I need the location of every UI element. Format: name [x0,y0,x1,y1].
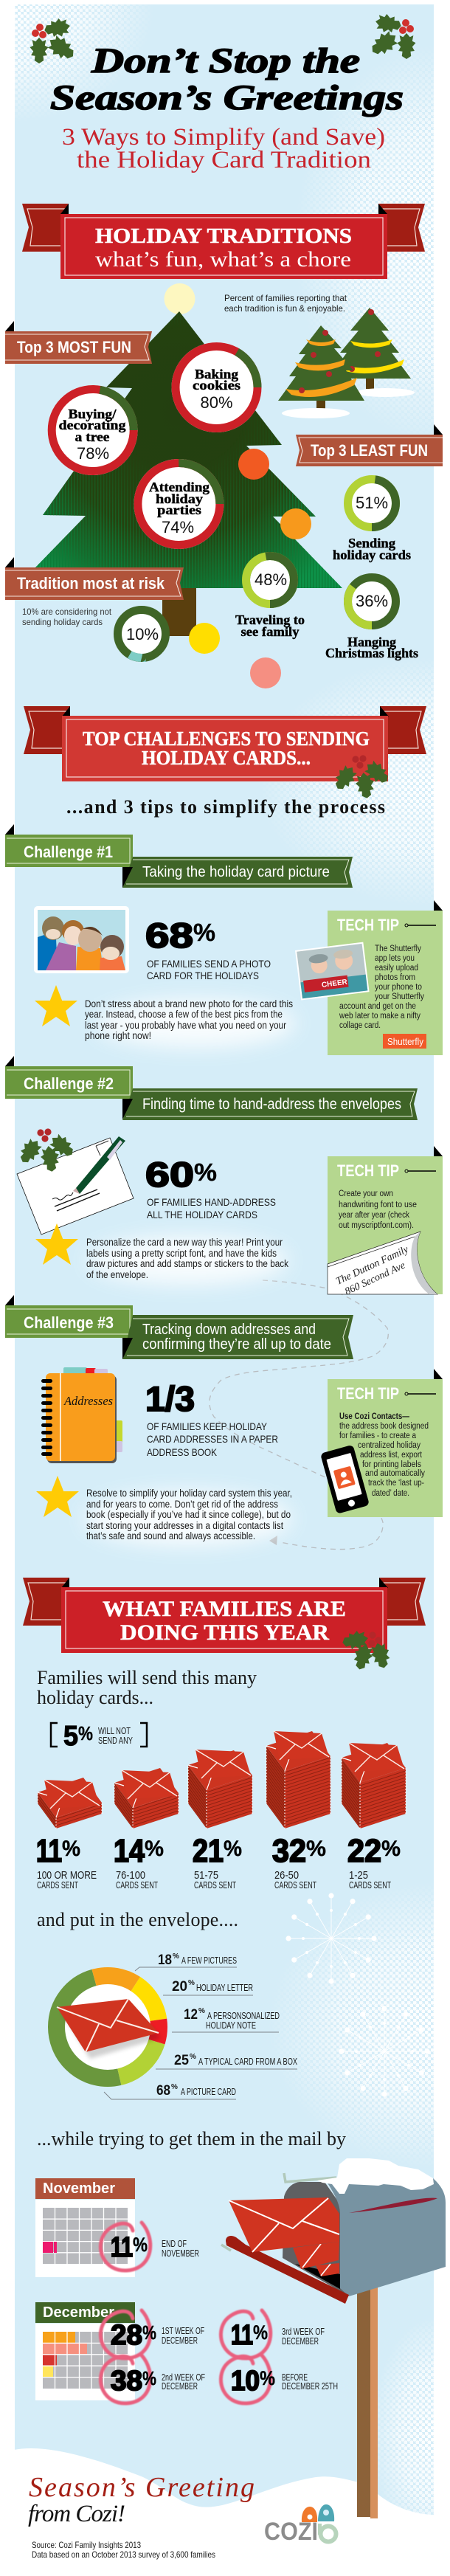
stat: 1/3: 1/3 [145,1379,195,1418]
ring: sending holiday cards 51% [333,480,411,562]
tech tip panel 2: The Dutton Family [334,1244,411,1288]
ring: buying decorating a tree 78%: a tree [75,429,110,444]
calendar: december: December [43,2304,114,2321]
tech tip panel 3: address list, export [360,1451,423,1460]
stack 22%: CARDS SENT [349,1880,391,1890]
tip text 2: labels using a pretty script font, and have the kids [86,1248,277,1259]
stat: 11% third week: DECEMBER [282,2335,319,2347]
challenge 3 heading: confirming they’re all up to date [142,1336,331,1353]
banner: top challenges [24,706,426,781]
ribbon: top 3 least fun: Top 3 LEAST FUN [311,441,428,460]
stack 21%: 21 [193,1833,224,1869]
tech tip panel 3: dated’ date. [372,1489,409,1498]
ring: hanging christmas lights 36%: 36% [356,592,388,610]
tech tip panel 1: account and get on the [339,1002,416,1011]
challenge 2 label [5,1056,133,1099]
stat: 1/3 [145,1379,278,1458]
stack 14%: % [145,1837,164,1861]
tech tip panel 1: The Shutterfly [375,945,421,953]
caption: percent of families: Percent of families reporting that [224,293,347,303]
ring: buying decorating a tree 78%: Buying/ [68,407,117,421]
stack 21%: % [224,1837,242,1861]
stat: 28%: 1ST WEEK OF [162,2325,204,2336]
label: 25%: A TYPICAL CARD FROM A BOX [198,2056,297,2067]
label: 12%: 12 [184,2007,198,2023]
challenge 3 heading: Tracking down addresses and [142,1322,316,1338]
stat: 28%: % [142,2321,156,2344]
tech tip panel 2 [328,1146,443,1298]
tech tip panel 1 [328,900,443,1055]
small christmas trees [278,308,415,418]
tip text 1: phone right now! [85,1030,151,1041]
caption: 10% considering [22,607,112,627]
stack 32%: 26-50 [274,1869,299,1882]
stack 11%: 11 [36,1833,62,1869]
caption: percent of families: each tradition is fun & enjoyable. [224,303,345,314]
banner: holiday traditions: HOLIDAY TRADITIONS [95,224,352,248]
challenge 2 label: Challenge #2 [24,1074,114,1093]
label: 12%: A PERSONSONALIZED [207,2010,280,2021]
stat: 60%: OF FAMILIES HAND-ADDRESS [147,1196,276,1208]
stat: 10% before dec 25: 10 [231,2366,260,2397]
holly on challenges banner [330,755,393,800]
label: 12%: HOLIDAY NOTE [206,2020,256,2031]
stack 32% [266,1731,330,1890]
snowflake 1 [285,1893,377,1984]
stat: 60%: % [194,1158,217,1186]
caption: percent of families [224,293,347,314]
tech tip panel 3: for printing labels [362,1460,421,1469]
stat: 60%: 60 [145,1155,194,1194]
tech tip panel 2: handwriting font to use [339,1201,417,1209]
challenge 1 label [5,824,133,867]
tip text 2: of the envelope. [86,1269,148,1280]
stat: 68% [145,916,271,981]
tech tip panel 1: web later to make a nifty [339,1012,420,1021]
tip text 2 [86,1237,288,1280]
label: 18%: % [173,1952,179,1961]
tech tip panel 3: centralized holiday [358,1441,420,1450]
ring: baking cookies 80%: 80% [200,393,233,412]
tech tip panel 2: 860 Second Ave [343,1260,407,1298]
heading: families will send [37,1667,257,1708]
challenge 2 heading [122,1088,418,1120]
stack 21%: CARDS SENT [194,1880,236,1890]
logo: cozi [264,2504,336,2546]
label: 68% [104,2083,236,2099]
icon: phone [320,1445,370,1514]
banner: what families are doing [23,1578,426,1653]
label: 68%: 68 [156,2083,170,2099]
stat: 10% before dec 25: DECEMBER 25TH [282,2380,338,2392]
stat: 60%: ALL THE HOLIDAY CARDS [147,1209,257,1220]
callout: 5% will not send any: WILL NOT [98,1725,131,1736]
stat: 10% before dec 25 [221,2355,338,2403]
challenge 3 heading [122,1315,353,1359]
tech tip panel 1: collage card. [339,1021,381,1030]
ribbon: top 3 least fun [296,424,443,466]
tech tip panel 2: Create your own [339,1189,393,1198]
label: 20%: 20 [172,1979,187,1995]
stack 14%: 76-100 [116,1869,145,1882]
closing greeting: from Cozi! [28,2501,125,2527]
heading: and put in the envelope: and put in the envelope.... [37,1909,238,1930]
big christmas tree [18,283,342,688]
stack 22%: % [381,1837,401,1861]
stack 11% [36,1778,102,1890]
tech tip panel 3: the address book designed [339,1422,429,1431]
tech tip panel 1: your Shutterfly [375,992,424,1001]
label: 68%: % [171,2083,178,2091]
tip text 3 [86,1488,292,1541]
ring: traveling to see family 48%: see family [240,624,300,639]
mailbox [221,2158,446,2518]
tip text 3: Resolve to simplify your holiday card system this year, [86,1488,292,1499]
calendar: november: November [43,2180,115,2197]
icon: address book: Addresses [63,1394,113,1408]
heading: families will send: Families will send this many [37,1667,257,1688]
stat: 68%: 68 [145,916,193,955]
calendar: november [35,2178,135,2277]
label: 18%: A FEW PICTURES [181,1955,237,1966]
stack 22%: 1-25 [349,1869,368,1882]
label: 68%: A PICTURE CARD [181,2086,236,2097]
tech tip panel 3 [328,1369,443,1517]
challenge 1 heading [122,857,353,888]
stack 11%: % [62,1837,80,1861]
ribbon: tradition most at risk: Tradition most at risk [17,574,165,593]
ring: baking cookies 80% [171,342,261,432]
callout: 5% will not send any [51,1721,147,1752]
subheading: 3 tips: ...and 3 tips to simplify the process [66,796,385,818]
icon: envelope and pen [15,1128,134,1235]
stack 21% [188,1750,252,1890]
callout: 5% will not send any: 5 [63,1721,78,1752]
icon: star 1 [35,985,77,1026]
icon: address book [41,1367,122,1463]
calendar: december [35,2302,135,2400]
snowflake 2 [339,2006,430,2097]
stack 11%: 100 OR MORE [37,1869,97,1882]
challenge 1 label: Challenge #1 [24,843,113,861]
stat: 11% end of november [100,2223,199,2271]
stat: 38%: DECEMBER [162,2380,198,2392]
banner: holiday traditions: what’s fun, what’s a chore [95,247,351,272]
tech tip panel 1: your phone to [375,983,422,992]
source note: Data based on an October 2013 survey of 3,600 families [32,2549,215,2560]
caption: 10% considering: 10% are considering not [22,607,112,617]
ring: 10% at risk [118,610,165,658]
ring: sending holiday cards 51%: Sending [348,536,395,550]
tech tip panel 3: track the ‘last up- [368,1479,424,1488]
tech tip panel 3: and automatically [365,1469,425,1478]
tip text 1: year. Instead, choose a few of the best pics from the [85,1009,283,1020]
holly top right [367,13,415,60]
ring: hanging christmas lights 36%: Christmas lights [325,646,418,660]
stat: 68%: % [193,919,215,946]
ring: traveling to see family 48%: 48% [255,570,287,589]
ring: 10% at risk: 10% [126,625,159,643]
stat: 38%: 38 [111,2366,142,2397]
title: Season’s Greetings [50,78,404,117]
tip text 1 [85,998,293,1041]
tip text 3: that’s safe and sound and always accessible. [86,1530,255,1541]
title [50,41,404,117]
ring: buying decorating a tree 78%: 78% [77,444,109,463]
icon: photo card [295,942,370,1000]
tech tip panel 1: photos from [375,973,415,982]
stat: 10% before dec 25: % [260,2367,275,2389]
stat: 1/3: ADDRESS BOOK [147,1446,218,1458]
stat: 28% [100,2310,204,2358]
ring: traveling to see family 48%: Traveling to [235,612,305,627]
ring: traveling to see family 48% [235,556,305,639]
stack 14% [114,1768,179,1890]
ring: attending holiday parties 74% [134,459,224,549]
banner: top challenges: TOP CHALLENGES TO SENDING [83,728,370,750]
ribbon: top 3 most fun [5,321,152,364]
tech tip panel 2: TECH TIP [337,1161,399,1180]
ring: hanging christmas lights 36%: Hanging [347,635,396,649]
icon: photo card: CHEER [321,978,348,990]
connector arrowhead [269,1536,277,1545]
stat: 11% third week: % [253,2321,268,2344]
stack 22%: 22 [347,1833,381,1869]
stat: 38%: 2nd WEEK OF [162,2372,205,2383]
tip text 2: draw pictures and add stamps or stickers to the back [86,1258,288,1269]
label: 25% [156,2053,297,2069]
closing greeting: Season’s Greeting [29,2472,255,2503]
source note [32,2540,215,2560]
source note: Source: Cozi Family Insights 2013 [32,2540,141,2550]
banner: top challenges: HOLIDAY CARDS... [142,747,311,769]
challenge 3 label [5,1295,133,1338]
label: 20%: % [188,1979,195,1987]
banner: holiday traditions [22,204,425,279]
label: 20%: HOLIDAY LETTER [196,1982,253,1993]
glow behind tip 1 [96,1000,295,1047]
stat: 11% end of november: % [133,2234,148,2256]
ring: attending holiday parties 74%: parties [157,503,201,517]
icon: star 3 [36,1476,79,1517]
dashed connector [210,1280,388,1550]
callout: 5% will not send any: % [78,1722,93,1744]
stat: 28%: 28 [111,2320,142,2351]
stack 21%: 51-75 [194,1869,218,1882]
tip text 3: and for years to come. Don’t get rid of the address [86,1499,278,1510]
label: 25%: % [190,2053,196,2061]
glow behind tip 2 [89,1237,288,1284]
tip text 2: Personalize the card a new way this year! Print your [86,1237,283,1248]
holly on families banner [341,1629,393,1672]
ring: buying decorating a tree 78%: decorating [59,418,125,432]
challenge 2 heading: Finding time to hand-address the envelopes [142,1096,401,1113]
holly top left [30,17,79,64]
tech tip panel 3: Use Cozi Contacts— [339,1412,409,1421]
ring: attending holiday parties 74%: Attending [149,480,210,494]
label: 20% [163,1979,253,1995]
subtitle: 3 Ways to Simplify (and Save) [62,124,385,151]
tip text 1: last year - you probably have what you need on your [85,1020,286,1031]
closing greeting [28,2472,255,2527]
tip text 3: start storing your addresses in a digital contacts list [86,1520,283,1531]
label: 18% [135,1952,237,1971]
stat: 1/3: CARD ADDRESSES IN A PAPER [147,1433,278,1445]
banner: what families are doing: DOING THIS YEAR [120,1620,329,1645]
stat: 68%: CARD FOR THE HOLIDAYS [147,970,259,981]
stat: 11% end of november: NOVEMBER [162,2248,199,2259]
ribbon: tradition most at risk [5,557,184,600]
stat: 11% third week [221,2310,325,2358]
label: 12%: % [198,2007,205,2015]
icon: family photo [34,906,129,973]
ring: buying decorating a tree 78% [48,385,138,475]
ring: attending holiday parties 74%: 74% [162,518,194,536]
stat: 38% [100,2355,205,2403]
stat: 60% [145,1155,276,1220]
tech tip panel 3: for families - to create a [339,1432,417,1440]
label: 12% [172,2007,280,2032]
stat: 68%: OF FAMILIES SEND A PHOTO [147,958,271,970]
stack 14%: 14 [114,1833,145,1869]
stat: 10% before dec 25: BEFORE [282,2372,308,2383]
stack 32%: % [306,1837,326,1861]
ring: baking cookies 80%: cookies [193,378,240,393]
tech tip panel 2: year after year (check [339,1211,409,1220]
donut chart: what goes in the envelope [56,1976,161,2078]
subtitle [62,124,385,173]
challenge 3 label: Challenge #3 [24,1313,114,1332]
ring: sending holiday cards 51%: 51% [356,494,388,512]
tip text 1: Don’t stress about a brand new photo for the card this [85,998,293,1009]
stat: 38%: % [142,2367,156,2389]
stat: 11% end of november: END OF [162,2238,187,2249]
stat: 11% end of november: 11 [111,2232,133,2263]
stack 22% [342,1743,406,1890]
stack 32%: 32 [272,1833,306,1869]
ring: hanging christmas lights 36% [325,577,418,660]
ring: attending holiday parties 74%: holiday [156,491,203,506]
tech tip panel 1: easily upload [375,964,418,973]
title: Don’t Stop the [91,41,360,80]
stack 14%: CARDS SENT [116,1880,158,1890]
caption: 10% considering: sending holiday cards [22,617,103,627]
stat: 28%: DECEMBER [162,2335,198,2346]
stack 11%: CARDS SENT [37,1880,78,1890]
subtitle: the Holiday Card Tradition [77,147,371,173]
ribbon: top 3 most fun: Top 3 MOST FUN [17,338,131,356]
logo: cozi: COZI [264,2518,318,2546]
heading: while trying to get them in the mail: ...while trying to get them in the mail by [37,2128,346,2149]
tech tip panel 1: Shutterfly [387,1036,423,1047]
tech tip panel 2: out myscriptfont.com). [339,1221,414,1230]
tip text 3: book (especially if you’ve had it since college), but do [86,1509,291,1520]
heading: families will send: holiday cards... [37,1687,153,1708]
callout: 5% will not send any: SEND ANY [98,1735,133,1746]
icon: star 2 [35,1223,78,1265]
stat: 1/3: OF FAMILIES KEEP HOLIDAY [147,1420,268,1432]
tech tip panel 3: TECH TIP [337,1384,399,1403]
challenge 1 heading: Taking the holiday card picture [142,864,330,880]
snow hill [14,2448,435,2576]
tech tip panel 1: app lets you [375,954,415,963]
banner: what families are doing: WHAT FAMILIES ARE [103,1597,346,1621]
label: 25%: 25 [174,2053,189,2068]
glow behind tip 3 [85,1492,291,1545]
stat: 11% third week: 3rd WEEK OF [282,2326,325,2337]
stat: 11% third week: 11 [231,2320,253,2351]
label: 18%: 18 [158,1952,172,1968]
ring: sending holiday cards 51%: holiday cards [333,548,411,562]
stack 32%: CARDS SENT [274,1880,316,1890]
tech tip panel 1: TECH TIP [337,916,399,934]
ring: baking cookies 80%: Baking [195,367,238,381]
